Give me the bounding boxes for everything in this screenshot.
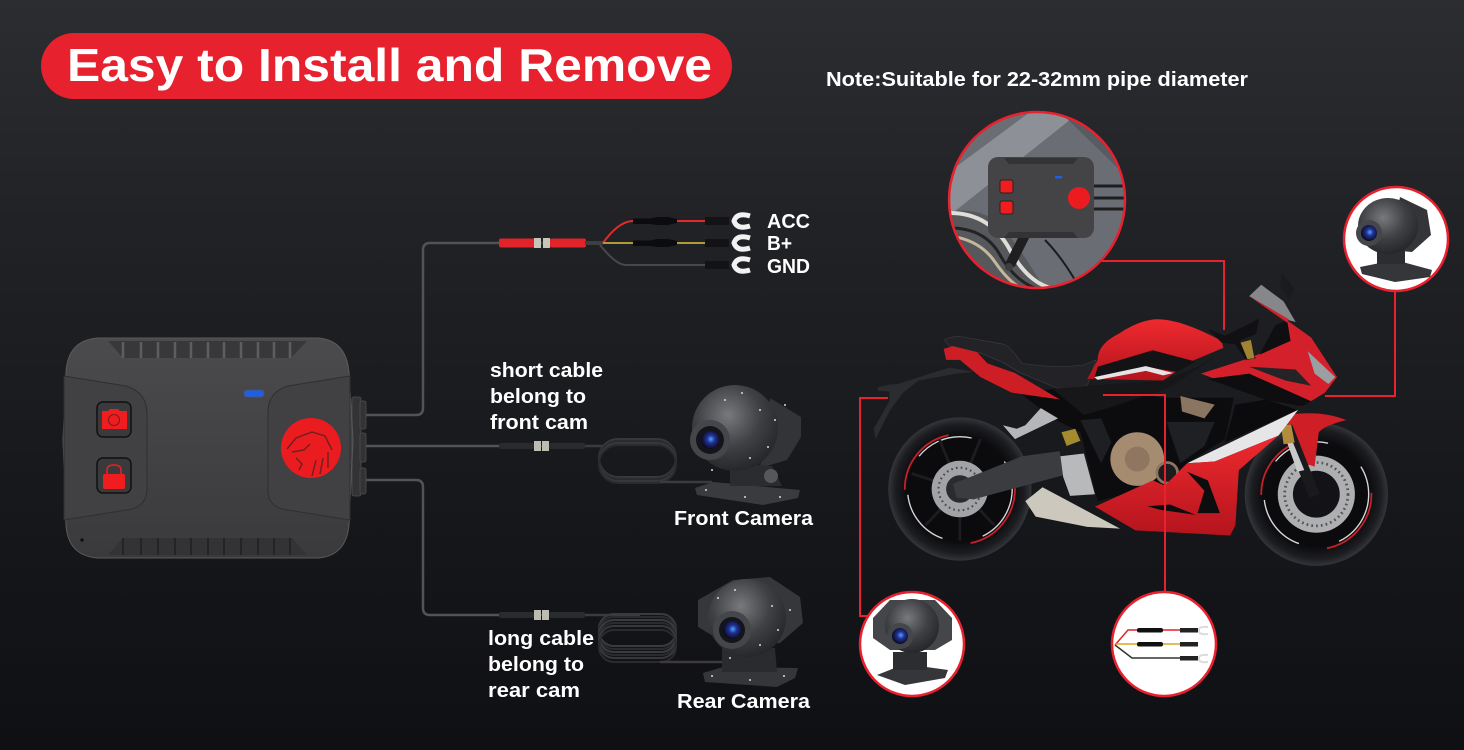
- front camera label: Front Camera: [674, 508, 814, 530]
- front camera: [690, 385, 801, 505]
- rear wheel: [888, 417, 1032, 561]
- exhaust: [1025, 487, 1120, 529]
- status LED: [244, 390, 264, 397]
- fork connector GND: [734, 259, 750, 271]
- recorder unit: [63, 338, 366, 558]
- callout: front camera: [1344, 187, 1448, 291]
- front fender: [1287, 413, 1346, 467]
- short cable label: belong to: [490, 386, 586, 408]
- short cable label: front cam: [490, 412, 588, 434]
- inline fuses: [633, 217, 677, 225]
- front camera cable with coil: [499, 439, 712, 483]
- callout lines: [860, 261, 1395, 616]
- lower fairing vent: [1187, 472, 1220, 513]
- left panel: [64, 376, 147, 520]
- fork connector B+: [734, 237, 750, 249]
- power cable harness: [499, 215, 750, 271]
- long cable label: [488, 628, 594, 702]
- label GND: GND: [767, 256, 810, 278]
- tank stripe: [1094, 350, 1196, 379]
- lower fairing: [1095, 436, 1278, 536]
- exhaust pipes: [952, 210, 1041, 287]
- right panel: [268, 376, 350, 520]
- title pill: [41, 33, 732, 99]
- upper fairing: [1201, 320, 1337, 406]
- swingarm: [953, 451, 1063, 499]
- title pill: Easy to Install and Remove: [67, 39, 712, 91]
- long cable label: long cable: [488, 628, 594, 650]
- background strip: [950, 113, 1069, 211]
- mid fairing black: [1225, 399, 1297, 443]
- label B+: B+: [767, 233, 792, 255]
- side connectors: [352, 397, 366, 496]
- terminals: [705, 217, 729, 269]
- split wires: [585, 241, 603, 245]
- bottom ribs: [108, 538, 307, 555]
- callout: power wiring: [1112, 592, 1216, 696]
- mounting strap: [1010, 235, 1025, 265]
- front wheel: [1245, 423, 1388, 566]
- white stripe: [1187, 410, 1298, 463]
- lion logo: [281, 418, 341, 478]
- front fork: [1280, 425, 1320, 498]
- rear camera label: Rear Camera: [677, 691, 811, 713]
- top ribs: [108, 341, 307, 358]
- camera button: [97, 402, 131, 437]
- note: pipe diameter: Note:Suitable for 22-32mm pipe diameter: [826, 69, 1248, 91]
- under tank black: [1053, 355, 1218, 415]
- motorcycle: [874, 272, 1388, 566]
- headlight: [1308, 351, 1335, 384]
- fairing black panel: [1208, 374, 1311, 406]
- frame gusset: [1080, 418, 1111, 463]
- rear camera: [698, 577, 803, 687]
- tank: [1087, 319, 1223, 381]
- short cable label: [490, 360, 603, 434]
- footpeg bracket: [1060, 454, 1095, 496]
- microphone hole: [80, 538, 84, 542]
- red inline connector: [499, 238, 586, 248]
- callout: rear camera: [860, 592, 964, 696]
- fork connector ACC: [734, 215, 750, 227]
- frame and engine: [1022, 384, 1234, 501]
- lock button: [97, 458, 131, 493]
- device body: [63, 338, 353, 558]
- long cable label: rear cam: [488, 680, 580, 702]
- tail fairing: [944, 346, 1060, 399]
- rear frame strut: [1003, 408, 1058, 439]
- shock absorber: [1061, 429, 1080, 446]
- mini cables: [1094, 186, 1126, 209]
- long cable label: belong to: [488, 654, 584, 676]
- handlebar: [1208, 319, 1260, 360]
- license plate bracket: [874, 367, 974, 439]
- cables from recorder: [366, 243, 500, 615]
- rear camera cable with coil: [499, 610, 722, 662]
- short cable label: short cable: [490, 360, 603, 382]
- callout: recorder mounted on pipe: [945, 112, 1130, 290]
- label ACC: ACC: [767, 211, 810, 233]
- inner fairing black: [1260, 320, 1290, 355]
- windscreen and mirror: [1249, 285, 1296, 322]
- engine cover: [1110, 432, 1164, 486]
- seat: [944, 336, 1096, 389]
